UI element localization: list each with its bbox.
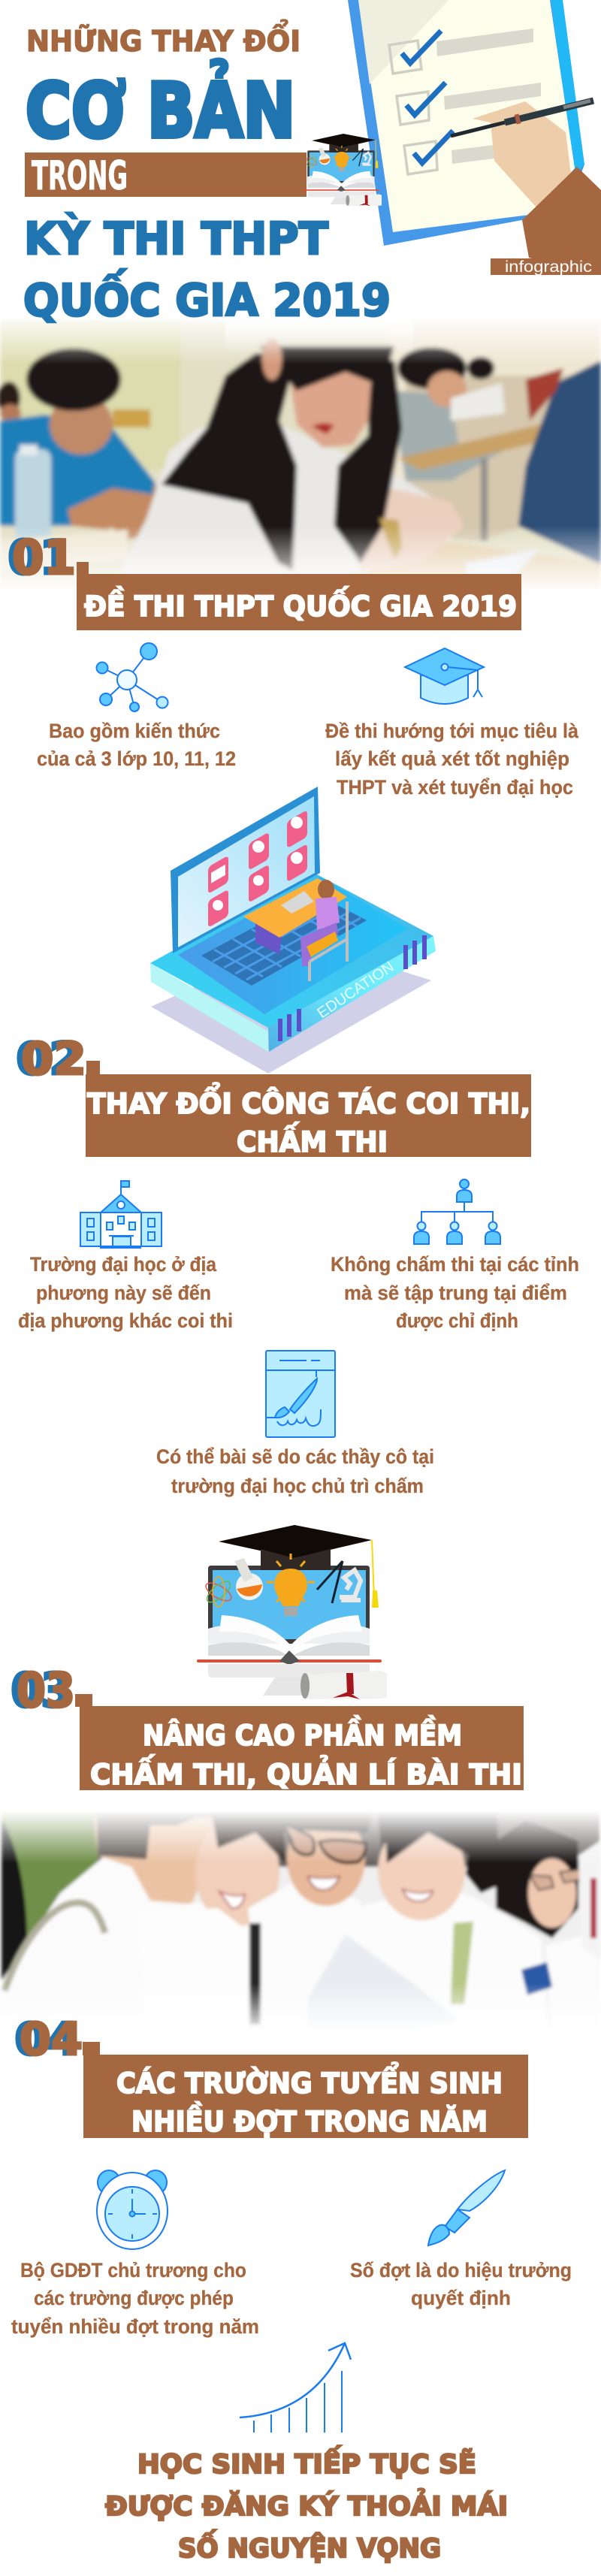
text: exam purpose <box>325 720 579 799</box>
text: exam purpose: lấy kết quả xét tốt nghiệp <box>335 747 569 770</box>
section 03 heading <box>80 1706 524 1791</box>
text: exam purpose: Đề thi hướng tới mục tiêu là <box>325 720 579 742</box>
text: universities supervise: địa phương khác coi thi <box>18 1309 233 1332</box>
title: QUỐC GIA 2019 <box>23 269 391 326</box>
section 02 number: 02 <box>16 1033 82 1086</box>
text: university graders: Có thể bài sẽ do các thầy cô tại <box>156 1445 434 1468</box>
title: CƠ BẢN <box>26 59 295 155</box>
icon: network nodes <box>96 643 168 711</box>
section 04 heading: NHIỀU ĐỢT TRONG NĂM <box>131 2101 488 2138</box>
illustration: laptop on book: EDUCATION <box>314 959 397 1022</box>
text: ministry policy <box>11 2259 259 2338</box>
section 02 heading: CHẤM THI <box>237 1122 388 1158</box>
text: knowledge: của cả 3 lớp 10, 11, 12 <box>37 747 236 770</box>
title <box>23 20 391 326</box>
illustration: clipboard checklist with hand <box>348 0 601 274</box>
text: ministry policy: tuyển nhiều đợt trong năm <box>11 2315 259 2338</box>
photo: smiling students <box>0 1788 601 2051</box>
section 03 heading: CHẤM THI, QUẢN LÍ BÀI THI <box>90 1754 522 1791</box>
text: ministry policy: Bộ GDĐT chủ trương cho <box>20 2259 246 2282</box>
illustration: laptop on book <box>150 787 436 1074</box>
section 01 number: 01 <box>12 530 76 585</box>
illustration: graduation cap, monitor and open book <box>197 1525 387 1699</box>
text: universities supervise <box>18 1253 233 1332</box>
icon: organisation tree <box>414 1179 500 1244</box>
text: ministry policy: các trường được phép <box>34 2287 234 2309</box>
text: university graders: trường đại học chủ trì chấm <box>171 1475 424 1497</box>
text: university graders <box>156 1445 434 1497</box>
text: grading centralised: Không chấm thi tại các tỉnh <box>331 1253 579 1276</box>
closing statement: ĐƯỢC ĐĂNG KÝ THOẢI MÁI <box>105 2487 508 2522</box>
label: infographic: infographic <box>505 258 592 276</box>
icon: graduation cap <box>405 648 484 704</box>
closing statement: HỌC SINH TIẾP TỤC SẼ <box>137 2445 476 2480</box>
icon: pen on paper <box>266 1351 335 1437</box>
text: universities supervise: Trường đại học ở địa <box>30 1253 217 1276</box>
section 04 heading: CÁC TRƯỜNG TUYỂN SINH <box>116 2062 503 2100</box>
text: rector decides <box>350 2259 572 2309</box>
icon: alarm clock <box>97 2170 168 2249</box>
text: grading centralised: được chỉ định <box>396 1309 518 1332</box>
text: grading centralised <box>331 1253 579 1332</box>
title: KỲ THI THPT <box>24 213 328 264</box>
section 02 number: 02 <box>21 1033 86 1086</box>
section 04 number: 04 <box>14 2013 79 2066</box>
section 03 number: 03 <box>11 1663 71 1718</box>
section 01 number: 01 <box>8 530 71 585</box>
closing statement: SỐ NGUYỆN VỌNG <box>178 2529 441 2564</box>
section 01 heading <box>77 574 521 630</box>
section 02 heading: THAY ĐỔI CÔNG TÁC COI THI, <box>87 1083 530 1120</box>
section 04 heading <box>83 2055 528 2138</box>
text: rector decides: quyết định <box>411 2287 511 2309</box>
icon: small graduation book <box>303 134 382 206</box>
section 03 heading: NÂNG CAO PHẦN MỀM <box>143 1715 462 1752</box>
label: infographic <box>491 258 601 276</box>
icon: school building <box>80 1180 162 1248</box>
section 02 heading <box>86 1074 531 1158</box>
photo: students taking exam <box>0 312 601 605</box>
text: universities supervise: phương này sẽ đến <box>36 1282 211 1304</box>
text: rector decides: Số đợt là do hiệu trưởng <box>350 2259 572 2282</box>
section 01 heading: ĐỀ THI THPT QUỐC GIA 2019 <box>84 586 517 623</box>
section 04 number: 04 <box>20 2013 83 2066</box>
title: NHỮNG THAY ĐỔI <box>26 20 300 58</box>
text: knowledge <box>37 720 236 770</box>
icon: paint brush <box>428 2170 505 2245</box>
closing statement <box>105 2445 508 2564</box>
text: grading centralised: mà sẽ tập trung tại điểm <box>344 1282 567 1304</box>
section 03 number: 03 <box>17 1663 75 1718</box>
title: TRONG <box>32 153 128 199</box>
text: exam purpose: THPT và xét tuyển đại học <box>337 776 573 799</box>
text: knowledge: Bao gồm kiến thức <box>49 720 220 742</box>
icon: rising growth chart arrow <box>240 2343 351 2433</box>
